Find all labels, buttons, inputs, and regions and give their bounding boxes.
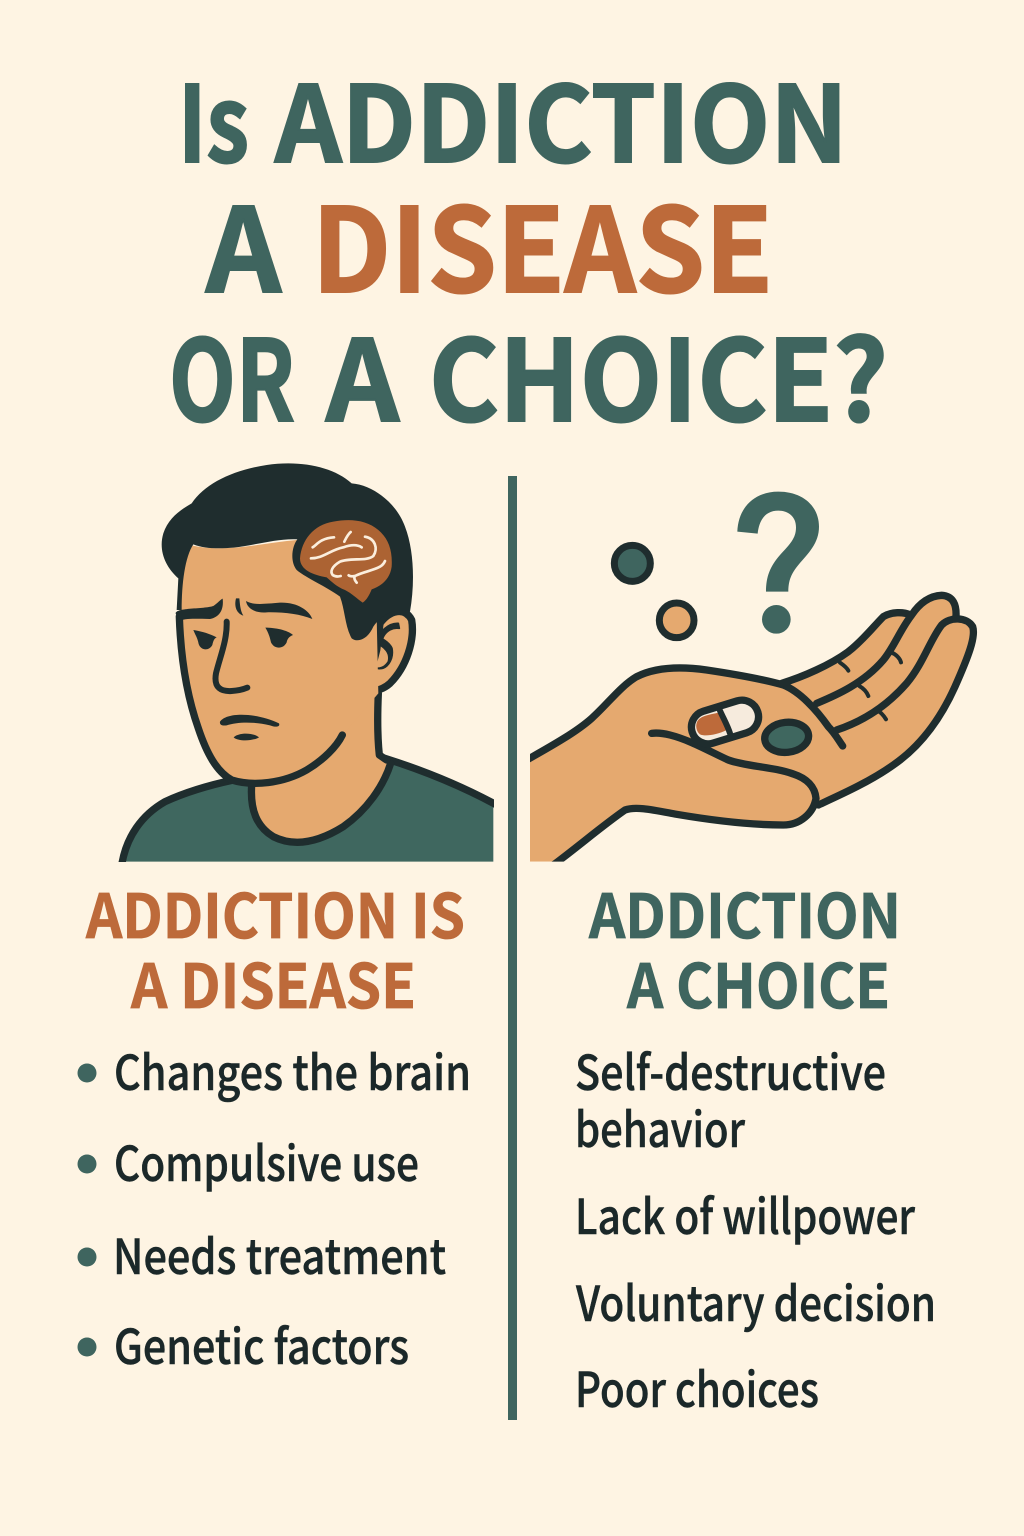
title: Is: [178, 41, 249, 193]
left heading: ADDICTION IS: [85, 867, 465, 956]
title: DISEASE: [312, 158, 773, 326]
right heading: A CHOICE: [626, 937, 890, 1026]
finger creases: [840, 663, 848, 671]
right list: Lack of willpower: [575, 1178, 915, 1248]
left list: Needs treatment: [113, 1218, 446, 1288]
illustration: open hand with pills and question mark: [527, 492, 974, 865]
hair: [162, 463, 413, 640]
title: ADDICTION: [274, 41, 848, 193]
neck: [255, 698, 387, 839]
mouth: [220, 715, 279, 727]
left heading: [85, 867, 465, 1026]
right list: behavior: [575, 1091, 745, 1161]
question mark: [737, 492, 819, 634]
title: A: [205, 158, 282, 326]
left list: Changes the brain: [114, 1034, 471, 1104]
falling pills: [614, 545, 650, 581]
face: [179, 540, 378, 783]
right list: Poor choices: [575, 1351, 819, 1421]
hand outline: [527, 668, 843, 760]
center divider: [508, 476, 517, 1420]
oval pill: [763, 720, 810, 755]
nose: [215, 622, 247, 691]
title: [169, 41, 888, 454]
capsule: [687, 696, 763, 748]
right heading: ADDICTION: [588, 867, 901, 956]
shirt: [121, 758, 493, 862]
hand: [530, 595, 974, 862]
left heading: A DISEASE: [130, 937, 416, 1026]
eyebrows: [176, 599, 223, 622]
right list: [575, 1034, 936, 1421]
title: OR: [169, 292, 295, 454]
left list: [78, 1034, 471, 1378]
right list: Self-destructive: [575, 1034, 886, 1104]
left list: Compulsive use: [114, 1125, 419, 1195]
illustration: worried man with brain: [121, 463, 497, 863]
title: CHOICE?: [429, 292, 888, 454]
eyes: [193, 630, 217, 649]
title: A: [325, 292, 400, 454]
left list: Genetic factors: [114, 1308, 409, 1378]
brain: [300, 520, 392, 603]
ear: [367, 612, 412, 690]
right list: Voluntary decision: [575, 1265, 936, 1335]
right heading: [588, 867, 901, 1026]
